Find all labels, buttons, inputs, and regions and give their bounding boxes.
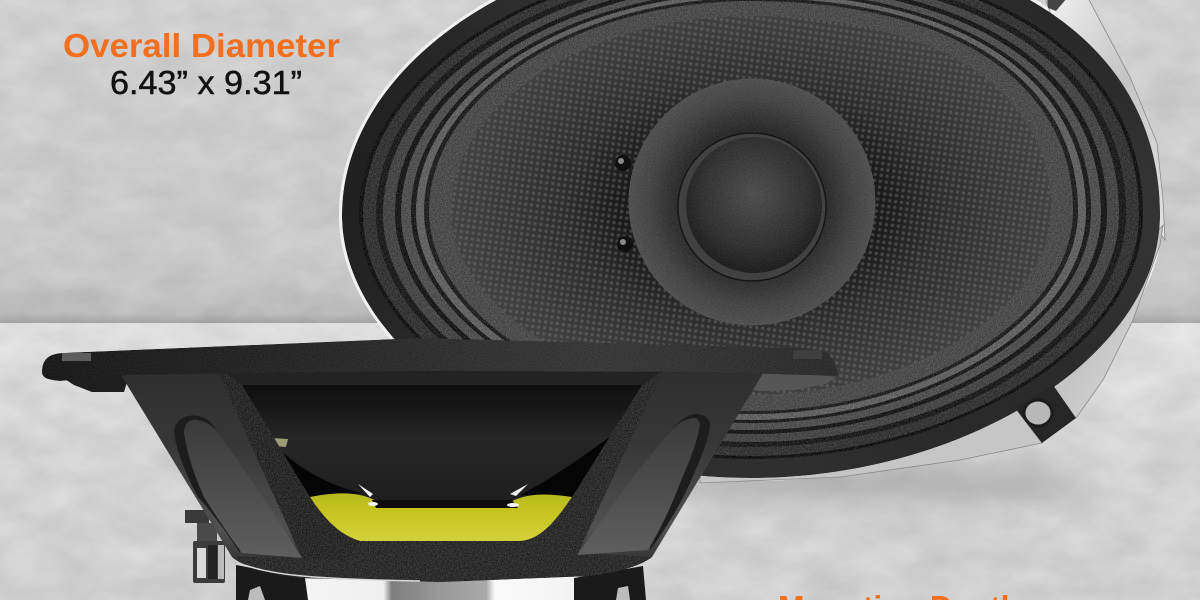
speaker cone mesh <box>451 16 1051 395</box>
dust cap <box>628 78 876 326</box>
inner window <box>242 385 642 541</box>
metal frame edge <box>339 0 1163 481</box>
background: concrete wall <box>0 0 1200 323</box>
rim mounting slot right <box>793 350 822 359</box>
strut right <box>520 372 662 560</box>
speaker side view <box>42 338 838 600</box>
basket body <box>118 370 765 582</box>
post highlight right <box>616 586 630 600</box>
text block: overall diameter <box>63 27 340 101</box>
floor shadow under oval speaker <box>670 462 1090 502</box>
metal frame corner: bottom <box>700 405 1042 483</box>
heading: overall diameter: Overall Diameter <box>63 27 340 64</box>
value: dimensions: 6.43” x 9.31” <box>110 64 302 101</box>
oval speaker front view <box>339 0 1165 483</box>
lower edge highlight <box>238 563 420 581</box>
basket bottom band <box>232 540 652 582</box>
mounting hole <box>1024 400 1052 426</box>
dark post right <box>574 566 646 600</box>
terminal lead <box>270 438 288 447</box>
inner black opening left <box>277 447 363 497</box>
metal frame corner: top right <box>1045 0 1165 240</box>
yellow cone <box>310 493 572 541</box>
surround ridges <box>359 0 1143 459</box>
mounting tab: top <box>1047 0 1067 11</box>
window top bar <box>222 370 662 386</box>
rim mounting slot left <box>62 353 91 361</box>
rear rim lip left <box>60 372 130 392</box>
inner black opening right <box>520 433 615 497</box>
metal frame corner: bottom right <box>1040 225 1163 430</box>
strut left <box>218 372 360 560</box>
terminal clamp <box>185 510 225 583</box>
mounting tab: bottom <box>1015 385 1076 443</box>
dark post left <box>236 565 308 600</box>
rim <box>42 338 838 381</box>
background: concrete floor <box>0 323 1200 600</box>
recess shadow left <box>174 416 240 553</box>
magnet chrome <box>300 575 578 600</box>
basket rim <box>342 0 1160 478</box>
rear rim lip right <box>745 368 836 391</box>
mounting bolts <box>615 155 633 252</box>
basket recess right <box>577 418 700 555</box>
basket recess left <box>184 420 302 558</box>
highlight glints <box>358 484 528 507</box>
recess shadow right <box>650 414 710 550</box>
magnet edge <box>372 500 518 508</box>
post highlight left <box>248 586 265 600</box>
